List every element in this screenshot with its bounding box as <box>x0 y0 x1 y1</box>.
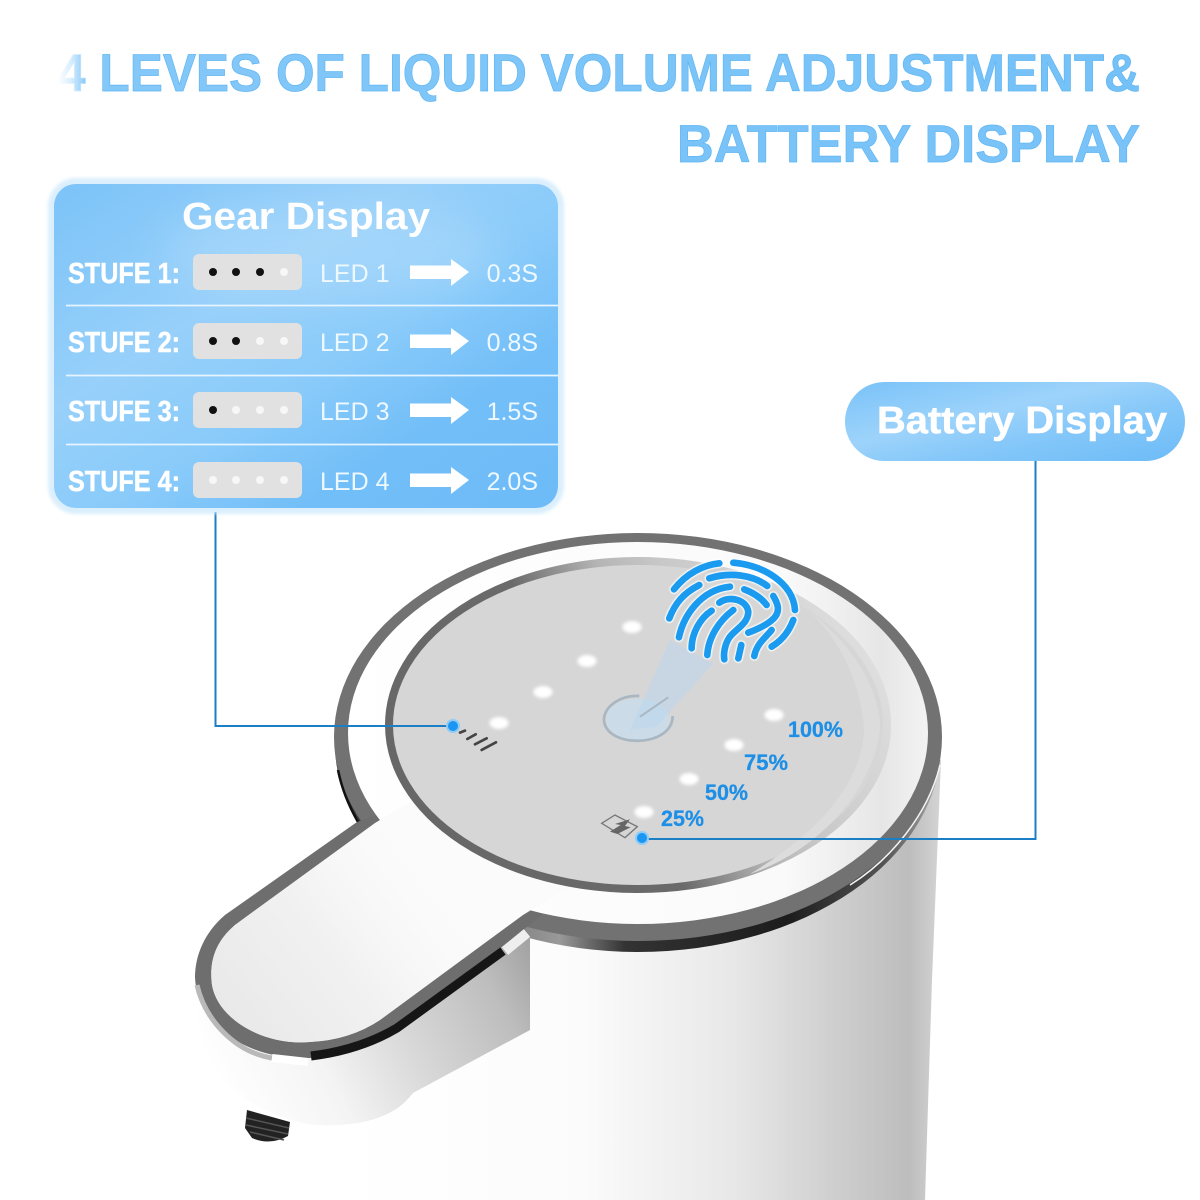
spout side <box>198 925 530 1125</box>
touch button <box>604 696 673 741</box>
row: stufe 3: STUFE 3: <box>68 396 180 428</box>
icon: battery <box>602 815 637 838</box>
panel: battery display label: Battery Display <box>877 400 1167 442</box>
rim underside band <box>335 536 941 952</box>
row: stufe 4: STUFE 4: <box>68 466 180 498</box>
row: stufe 1 <box>68 254 538 290</box>
dispenser body <box>350 760 941 1200</box>
row: stufe 2 <box>68 323 538 359</box>
panel: gear display <box>48 178 564 514</box>
gear level LEDs <box>490 621 642 729</box>
row: stufe 1: LED 1 <box>320 260 389 288</box>
nozzle <box>245 1110 290 1142</box>
battery percentages: 25% <box>661 806 704 831</box>
dispenser product <box>195 533 942 1200</box>
title <box>58 44 1140 174</box>
panel heading: Gear Display <box>182 196 430 238</box>
panel: battery display label <box>845 382 1185 461</box>
battery level LEDs <box>634 709 784 818</box>
battery percentages: 75% <box>744 750 788 775</box>
connector line: battery display <box>635 461 1036 845</box>
row: stufe 4: LED 4 <box>320 468 390 496</box>
spout lower black trim <box>197 933 527 1062</box>
row: stufe 1: STUFE 1: <box>68 258 180 290</box>
rim highlights <box>338 765 940 885</box>
white ring <box>348 542 928 924</box>
row: stufe 3: 1.5S <box>487 398 538 426</box>
row: stufe 2: 0.8S <box>487 329 538 357</box>
row: stufe 4: 2.0S <box>487 468 538 496</box>
spout chrome edge <box>195 800 560 1058</box>
chrome rim <box>334 533 942 941</box>
row: stufe 4 <box>68 462 538 498</box>
row: stufe 3: LED 3 <box>320 398 389 426</box>
battery percentages: 100% <box>788 717 843 742</box>
row: stufe 1: 0.3S <box>487 260 538 288</box>
title: 4 LEVES OF LIQUID VOLUME ADJUSTMENT& <box>58 44 1140 103</box>
row: stufe 2: STUFE 2: <box>68 327 180 359</box>
connector line: gear display <box>216 512 460 733</box>
battery percentages: 50% <box>705 780 748 805</box>
row: stufe 2: LED 2 <box>320 329 389 357</box>
row: stufe 3 <box>68 392 538 428</box>
fingerprint icon <box>669 563 795 659</box>
inner control plate <box>389 561 887 889</box>
spout top surface <box>211 790 580 1042</box>
title: BATTERY DISPLAY <box>677 115 1140 174</box>
battery percentages <box>661 717 843 831</box>
icon: signal bars <box>460 731 496 750</box>
row dividers <box>66 306 558 444</box>
touch beam <box>630 640 713 730</box>
